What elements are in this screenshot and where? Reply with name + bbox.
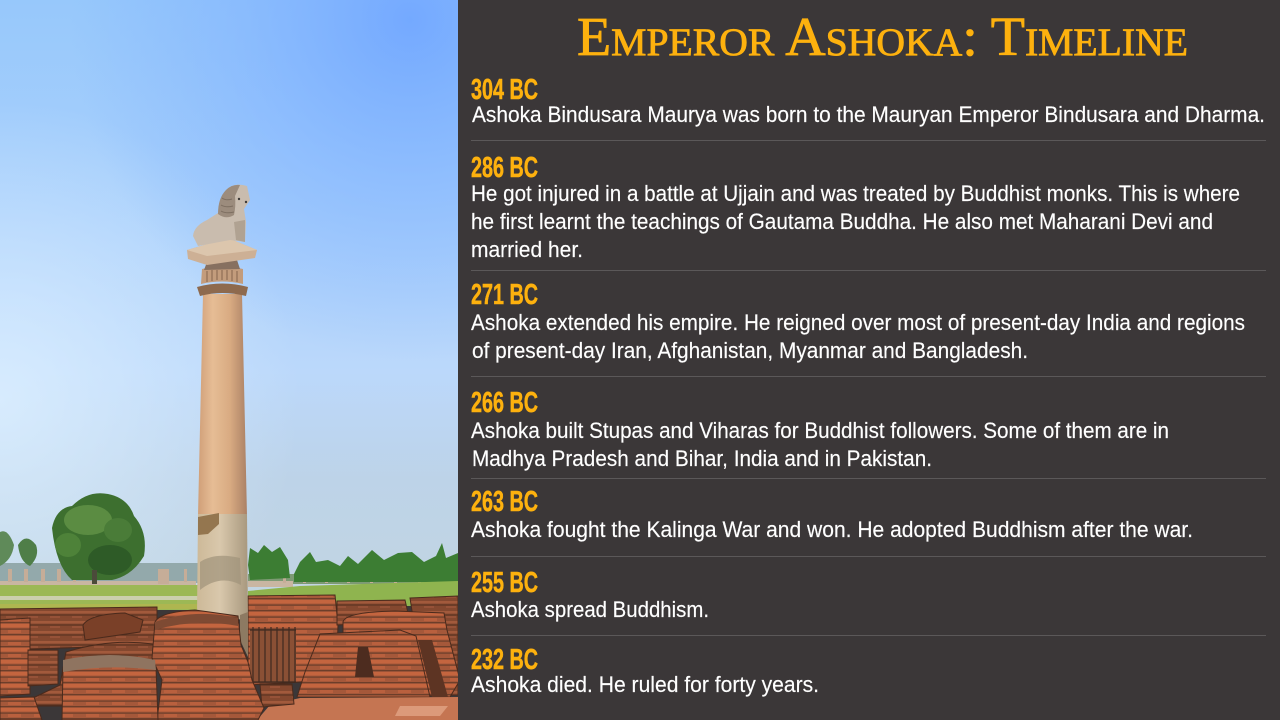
far left wall	[0, 607, 157, 650]
title: Emperor Ashoka: Timeline	[577, 6, 1188, 67]
entry: 232 BC: 232 BC	[471, 644, 538, 676]
entry: 266 BC	[471, 387, 1169, 471]
abacus	[187, 238, 257, 265]
stack right of pillar	[248, 595, 338, 685]
rear drum	[33, 642, 156, 706]
gate base	[260, 684, 294, 707]
entry: 271 BC: 271 BC	[471, 279, 538, 311]
entry: 304 BC	[471, 74, 1265, 127]
entry: 286 BC: 286 BC	[471, 152, 538, 184]
grass	[0, 581, 458, 610]
entry: 263 BC	[471, 486, 1193, 542]
front brick drum	[62, 655, 158, 720]
entry: 255 BC	[471, 567, 709, 622]
entry: 266 BC: Madhya Pradesh and Bihar, India and in Pakistan.	[472, 446, 932, 471]
brick ruins	[0, 595, 460, 720]
entry: 286 BC: married her.	[471, 237, 583, 262]
entry: 263 BC: Ashoka fought the Kalinga War and won. He adopted Buddhism after the war.	[471, 517, 1193, 542]
brick stack at the pillar base	[152, 610, 264, 720]
entry: 286 BC: He got injured in a battle at Ujjain and was treated by Buddhist monks. This is where	[471, 181, 1240, 206]
entry: 271 BC	[471, 279, 1245, 363]
entry: 271 BC: Ashoka extended his empire. He reigned over most of present-day India and regions	[471, 310, 1245, 335]
iron gate	[250, 627, 296, 682]
entry: 232 BC: Ashoka died. He ruled for forty years.	[471, 672, 819, 697]
shaft	[198, 294, 247, 516]
banana plants	[248, 543, 458, 582]
entry: 266 BC: 266 BC	[471, 387, 538, 419]
sky	[0, 0, 458, 600]
entry: 271 BC: of present-day Iran, Afghanistan, Myanmar and Bangladesh.	[472, 338, 1028, 363]
distant treeline and fence	[0, 563, 458, 587]
left column	[0, 618, 30, 696]
entry: 255 BC: 255 BC	[471, 567, 538, 599]
right panel background	[458, 0, 1280, 720]
entry: 286 BC: he first learnt the teachings of Gautama Buddha. He also met Maharani Devi and	[471, 209, 1213, 234]
lion	[193, 185, 250, 246]
photo: Ashoka pillar at Vaishali	[0, 0, 460, 720]
trees	[0, 493, 145, 584]
ground slab	[257, 697, 458, 720]
entry: 286 BC	[471, 152, 1240, 262]
entry: 266 BC: Ashoka built Stupas and Viharas for Buddhist followers. Some of them are in	[471, 418, 1169, 443]
pillar	[187, 185, 257, 657]
entry: 304 BC: 304 BC	[471, 74, 538, 106]
entry: 263 BC: 263 BC	[471, 486, 538, 518]
capital	[197, 284, 248, 296]
entry: 255 BC: Ashoka spread Buddhism.	[471, 597, 709, 622]
entry: 232 BC	[471, 644, 819, 697]
pyramid ruin with niche	[297, 630, 430, 697]
